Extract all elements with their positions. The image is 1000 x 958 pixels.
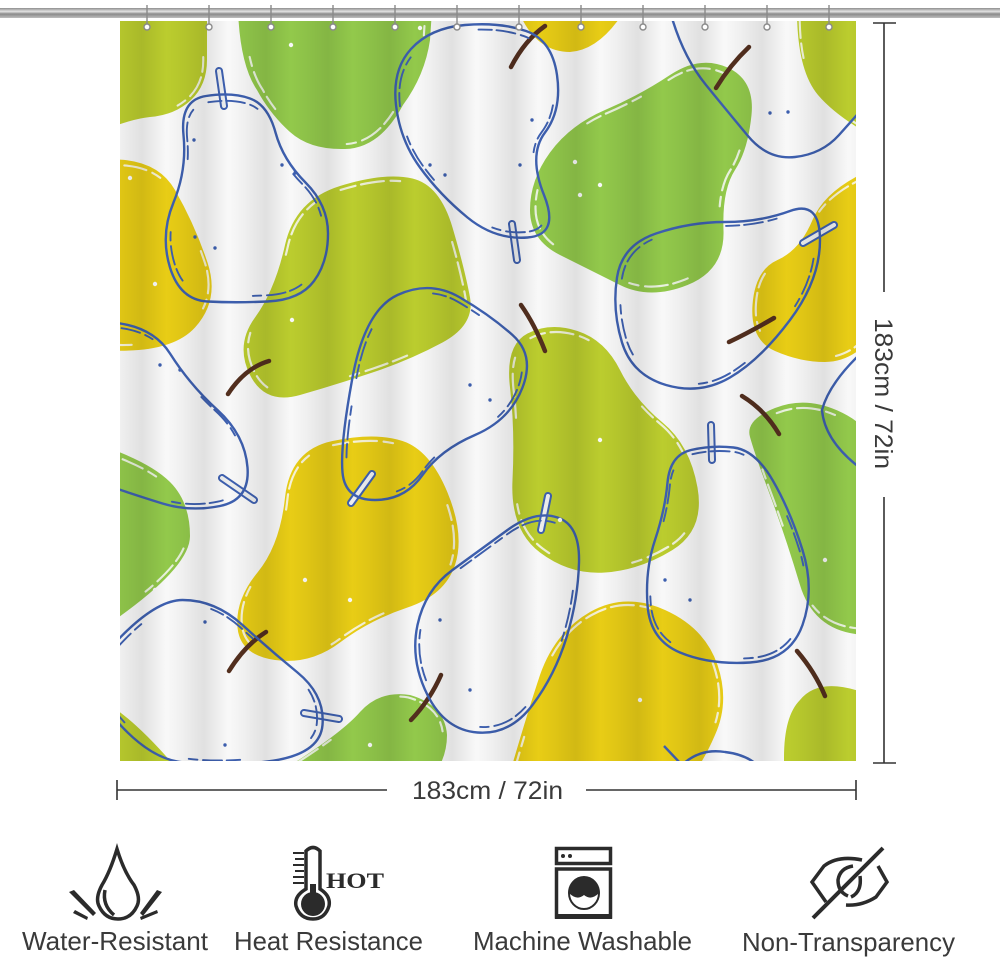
blue and white speckle dots [128,26,827,747]
label: non-transparency: Non-Transparency [742,927,955,957]
width dimension [117,777,856,805]
label: machine washable: Machine Washable [473,926,692,956]
blue pear outlines [100,18,870,770]
height dimension [869,23,897,763]
shower curtain panel [100,10,870,790]
blue outline pear stems [219,71,834,719]
pear fills [100,10,870,790]
label: heat resistance: Heat Resistance [234,926,423,956]
height dimension: 183cm / 72in [869,318,897,469]
shower rod [0,8,1000,18]
icon: washing machine [555,848,612,919]
curtain fold shading [120,21,856,761]
icon: crossed eye [812,848,887,918]
icon: thermometer hot [293,848,384,919]
icon: thermometer hot: HOT [326,868,384,893]
white highlight dashes on pear fills [104,15,867,786]
blue inner dashes of outlines [103,30,815,761]
label: water-resistant: Water-Resistant [22,926,209,956]
curtain rings [144,5,832,30]
width dimension: 183cm / 72in [412,777,563,805]
icon: water drop [69,849,162,920]
curtain base [120,21,856,761]
brown pear stems [228,26,825,720]
